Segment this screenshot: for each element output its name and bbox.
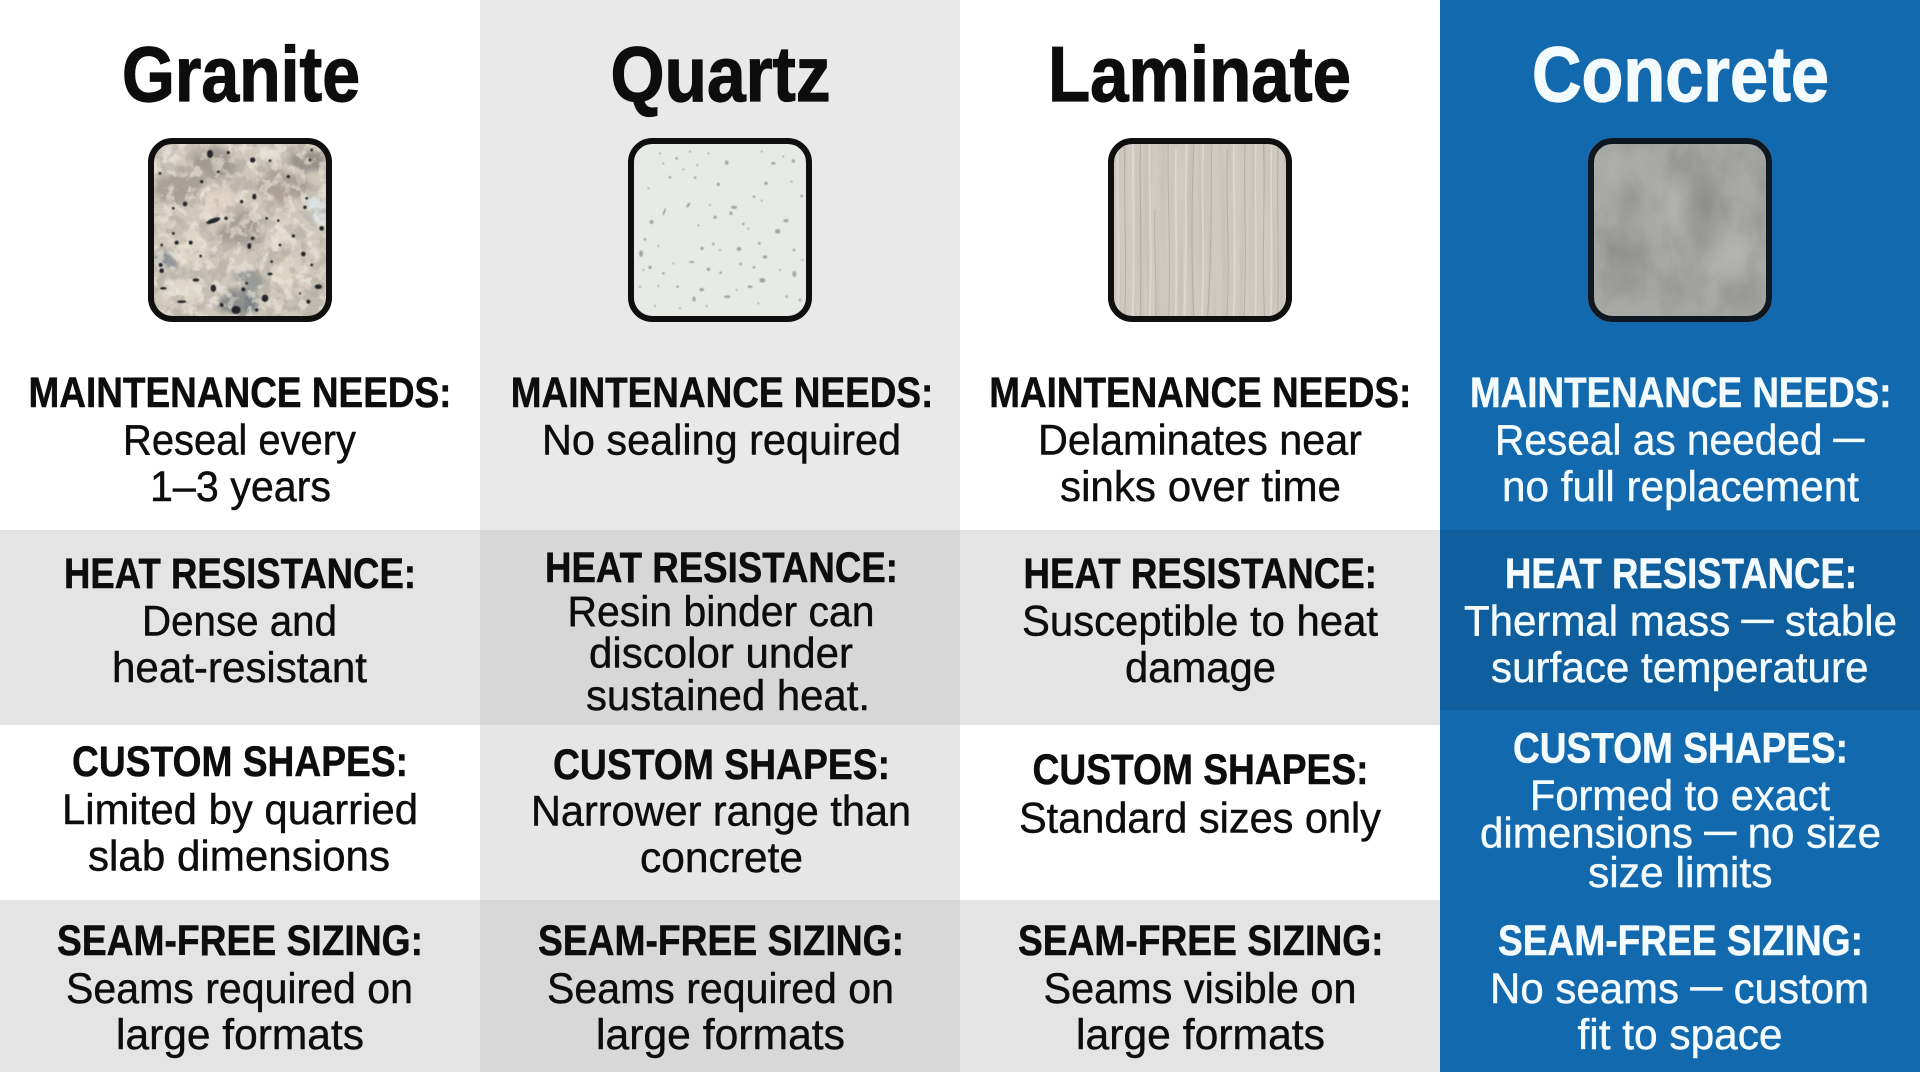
row: heat resistance (Laminate): damage [1125,644,1276,692]
row: seam-free sizing (Quartz) [480,900,960,1072]
row: seam-free sizing (Quartz): large formats [596,1011,845,1059]
swatch: granite texture [148,138,332,322]
row: custom shapes (Quartz): Narrower range than [531,788,911,836]
row: custom shapes (Concrete): size limits [1588,849,1772,897]
heading: Granite: Granite [122,30,360,118]
row text: maintenance needs (Concrete) [1470,369,1892,511]
row text: maintenance needs (Concrete): — [1834,420,1864,456]
row: heat resistance (Granite): heat-resistant [112,644,367,692]
row text: maintenance needs (Granite): MAINTENANCE NEEDS: [28,369,452,417]
swatch: laminate wood grain [1108,138,1292,322]
row: seam-free sizing (Concrete): SEAM-FREE SIZING: [1498,917,1863,965]
row: seam-free sizing (Laminate): large formats [1076,1011,1325,1059]
row: custom shapes (Concrete): — [1705,812,1736,848]
row: seam-free sizing (Granite): Seams required on [66,965,413,1013]
row: heat resistance (Quartz): HEAT RESISTANCE: [545,544,898,592]
row: seam-free sizing (Concrete): — [1691,968,1722,1004]
row: custom shapes (Granite): CUSTOM SHAPES: [72,738,408,786]
row: custom shapes (Laminate): Standard sizes only [1019,794,1381,842]
row text: maintenance needs (Quartz) [511,369,933,464]
row: custom shapes (Laminate): CUSTOM SHAPES: [1032,746,1368,794]
row: heat resistance (Concrete) [1440,530,1920,710]
row: custom shapes (Laminate) [960,725,1440,900]
row: custom shapes (Granite) [0,725,480,900]
row text: maintenance needs (Quartz): MAINTENANCE NEEDS: [511,369,933,417]
row: heat resistance (Laminate) [960,530,1440,725]
row: heat resistance (Quartz): sustained heat. [586,672,870,720]
row: custom shapes (Concrete): no size [1736,810,1881,858]
swatch: concrete texture [1588,138,1772,322]
heading: Quartz: Quartz [610,30,830,118]
row: seam-free sizing (Laminate): SEAM-FREE SIZING: [1018,917,1384,965]
row: seam-free sizing (Granite): SEAM-FREE SIZING: [57,917,423,965]
row: custom shapes (Granite): slab dimensions [88,832,390,880]
row: heat resistance (Laminate): Susceptible to heat [1022,598,1378,646]
row: custom shapes (Concrete): CUSTOM SHAPES: [1513,724,1848,772]
row: custom shapes (Concrete): Formed to exact [1530,772,1830,820]
row text: maintenance needs (Granite): 1–3 years [150,463,331,511]
row: heat resistance (Concrete): surface temperature [1491,644,1868,692]
row: seam-free sizing (Concrete) [1490,917,1869,1059]
row: seam-free sizing (Quartz): Seams required on [547,965,894,1013]
row: custom shapes (Quartz): concrete [640,834,803,882]
row text: maintenance needs (Laminate): Delaminates near [1038,416,1362,464]
panel: Quartz column [480,0,960,1072]
row: heat resistance (Concrete): Thermal mass [1464,598,1736,646]
row: seam-free sizing (Concrete): No seams [1490,965,1684,1013]
row: heat resistance (Quartz): Resin binder can [568,588,874,636]
row: custom shapes (Concrete) [1480,724,1881,897]
row text: maintenance needs (Quartz): No sealing required [542,416,901,464]
row: heat resistance (Quartz): discolor under [589,630,853,678]
row text: maintenance needs (Concrete): Reseal as needed [1495,416,1842,464]
row: custom shapes (Concrete): dimensions [1480,810,1698,858]
row: heat resistance (Concrete): — [1742,600,1773,636]
row: seam-free sizing (Laminate) [960,900,1440,1072]
row: custom shapes (Quartz) [480,725,960,900]
row: seam-free sizing (Granite) [0,900,480,1072]
row: heat resistance (Granite) [0,530,480,725]
panel: Laminate column [960,0,1440,1072]
row: heat resistance (Granite): Dense and [142,598,337,646]
row: seam-free sizing (Laminate): Seams visible on [1044,965,1356,1013]
row: seam-free sizing (Granite): large formats [116,1011,364,1059]
row text: maintenance needs (Laminate): sinks over time [1060,463,1341,511]
row: heat resistance (Quartz) [480,530,960,725]
row: seam-free sizing (Quartz): SEAM-FREE SIZING: [538,917,904,965]
row text: maintenance needs (Laminate) [989,369,1411,511]
row text: maintenance needs (Concrete): no full replacement [1502,463,1859,511]
row: heat resistance (Granite): HEAT RESISTANCE: [64,550,416,598]
row text: maintenance needs (Granite): Reseal every [123,416,356,464]
heading: Concrete: Concrete [1532,30,1829,118]
row: heat resistance (Concrete): stable [1773,598,1897,646]
row: custom shapes (Granite): Limited by quarried [62,786,418,834]
panel: Granite column [0,0,480,1072]
row text: maintenance needs (Laminate): MAINTENANCE NEEDS: [989,369,1411,417]
swatch: quartz texture [628,138,812,322]
row: seam-free sizing (Concrete): fit to space [1578,1011,1782,1059]
row: custom shapes (Quartz): CUSTOM SHAPES: [553,741,890,789]
row: heat resistance (Concrete): HEAT RESISTANCE: [1505,550,1857,598]
panel: Concrete column (highlighted) [1440,0,1920,1072]
heading: Laminate: Laminate [1048,30,1351,118]
row text: maintenance needs (Granite) [28,369,452,511]
row: heat resistance (Laminate): HEAT RESISTANCE: [1024,550,1377,598]
row: seam-free sizing (Concrete): custom [1722,965,1869,1013]
